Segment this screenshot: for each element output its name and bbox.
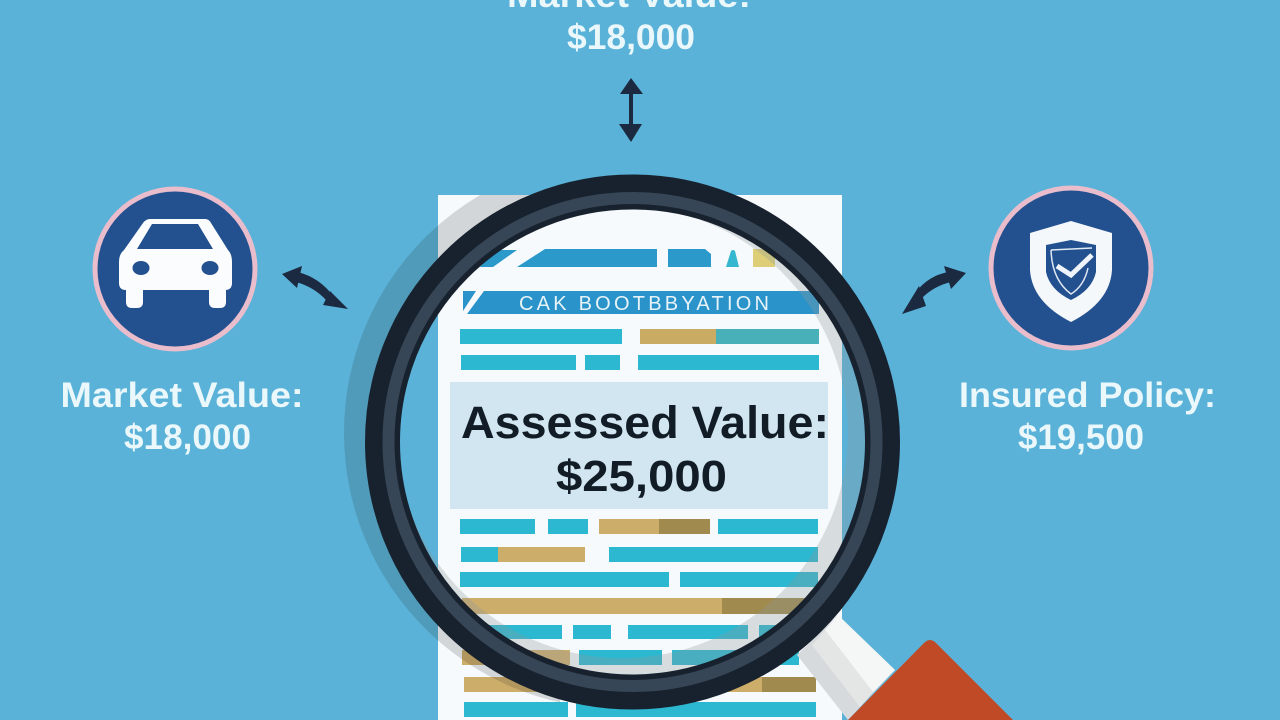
label: insured policy: Insured Policy:: [959, 376, 1216, 415]
panel: document: [438, 195, 842, 720]
lens shadow: [344, 195, 560, 702]
label: top market value: $18,000: [567, 18, 695, 57]
icon: car badge: [92, 186, 258, 352]
lower text rows: [460, 519, 818, 717]
icon: magnifier ring: [382, 192, 882, 692]
assessed value callout: $25,000: [556, 452, 727, 501]
label: left market value: Market Value:: [60, 376, 304, 415]
arrow: right curved double arrow: [902, 266, 966, 314]
lens glass shading: [396, 206, 865, 675]
label: insured policy: $19,500: [1018, 418, 1144, 457]
top document bars: [480, 249, 775, 267]
label: top market value: [507, 0, 751, 57]
icon: shield badge: [988, 186, 1154, 350]
upper text rows: [460, 329, 819, 370]
arrow: vertical double arrow: [619, 78, 643, 142]
section header bar: [463, 291, 819, 315]
label: left market value: $18,000: [124, 418, 251, 457]
icon: magnifier handle: [797, 615, 1013, 720]
assessed value callout: [450, 382, 829, 509]
section header bar: CAK BOOTBBYATION: [519, 293, 769, 315]
arrow: left curved double arrow: [282, 266, 348, 309]
label: left market value: [60, 376, 304, 457]
label: insured policy: [959, 376, 1216, 457]
assessed value callout: Assessed Value:: [461, 397, 829, 448]
